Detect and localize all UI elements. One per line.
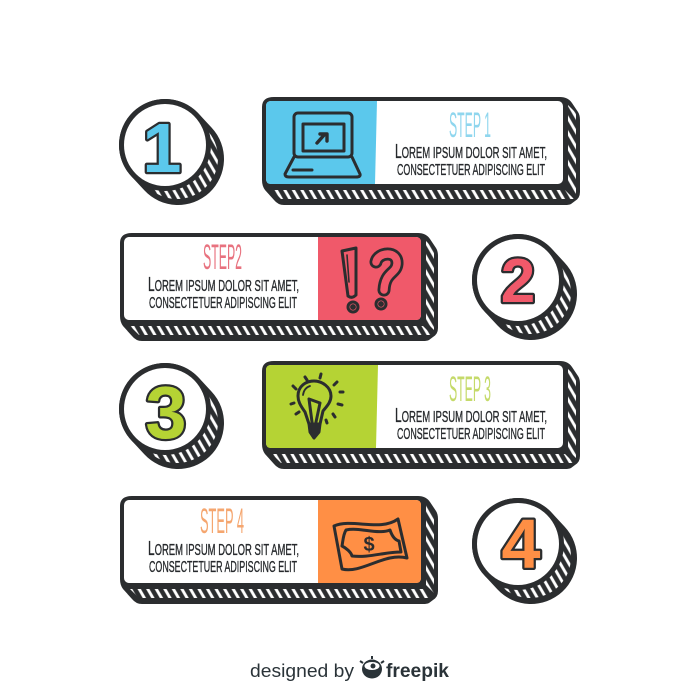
text block: step 2: CONSECTETUER ADIPISCING ELIT — [149, 295, 297, 312]
panel: step 4: STEP 4 — [200, 502, 244, 541]
icon: freepik logo — [360, 656, 384, 678]
text block: step 1 — [395, 141, 547, 179]
badge: number 1 — [119, 99, 218, 199]
panel: step 4 — [120, 496, 438, 604]
panel: step 3: STEP 3 — [449, 370, 491, 409]
text block: step 1: LOREM IPSUM DOLOR SIT AMET, — [395, 141, 547, 163]
panel: step 2: STEP2 — [203, 238, 242, 277]
icon: light bulb — [291, 374, 343, 438]
badge: number 4: 4 — [502, 505, 541, 583]
badge: number 1: 1 — [143, 109, 181, 187]
text block: step 2: LOREM IPSUM DOLOR SIT AMET, — [148, 274, 299, 296]
badge: number 3: 3 — [145, 371, 187, 454]
badge: number 2 — [472, 234, 571, 334]
badge: number 3 — [119, 363, 218, 463]
panel: step 3 — [262, 361, 580, 469]
text block: step 4: CONSECTETUER ADIPISCING ELIT — [149, 559, 297, 576]
icon text: dollar sign: $ — [363, 534, 375, 556]
text block: step 2 — [148, 274, 299, 312]
text block: step 3: LOREM IPSUM DOLOR SIT AMET, — [395, 405, 547, 427]
footer credit: designed by — [250, 660, 355, 681]
badge: number 4 — [472, 498, 571, 598]
text block: step 1: CONSECTETUER ADIPISCING ELIT — [397, 162, 545, 179]
text block: step 3 — [395, 405, 547, 443]
text block: step 4 — [148, 538, 299, 576]
icon: banknote — [334, 519, 407, 570]
text block: step 3: CONSECTETUER ADIPISCING ELIT — [397, 426, 545, 443]
icon: laptop — [285, 113, 360, 177]
footer credit — [250, 656, 449, 682]
icon: exclamation and question marks — [342, 248, 397, 312]
badge: number 2: 2 — [501, 247, 535, 316]
panel: step 1: STEP 1 — [449, 106, 491, 145]
panel: step 2 — [120, 233, 438, 341]
footer credit: freepik — [386, 661, 449, 682]
panel: step 1 — [262, 97, 580, 205]
text block: step 4: LOREM IPSUM DOLOR SIT AMET, — [148, 538, 299, 560]
